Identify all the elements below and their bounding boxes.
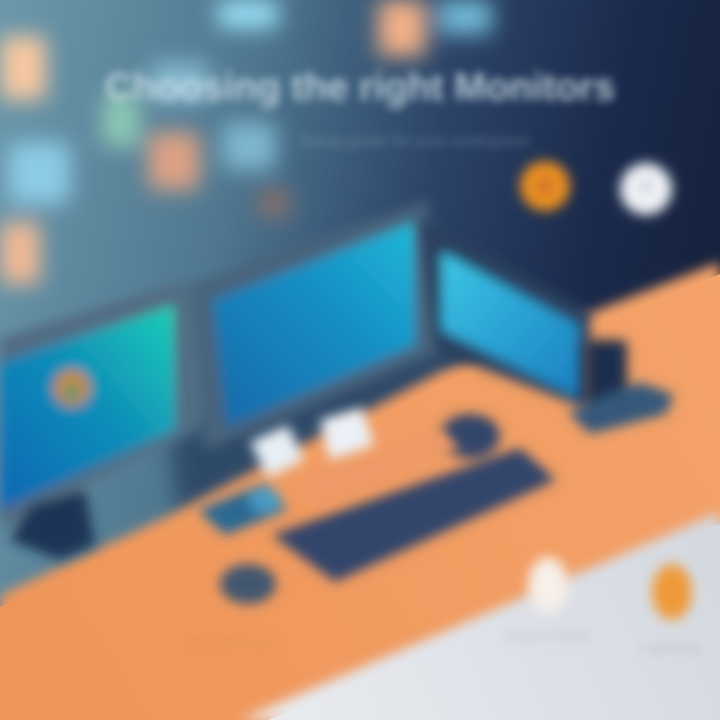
icon: white item on floor: [528, 557, 568, 613]
icon: colourful logo: [54, 370, 90, 406]
monitor: left: [0, 280, 198, 560]
floating app tiles: [0, 0, 492, 284]
monitor stand: [10, 490, 95, 560]
icon: orange item on floor: [652, 564, 692, 620]
monitor: centre: [190, 200, 445, 450]
icon: orange badge: [520, 161, 570, 211]
subtitle: Setup guide for your workspace: [300, 133, 530, 150]
wall shadow under monitors: [170, 340, 470, 520]
title: Choosing the right Monitors: [105, 66, 615, 109]
caption: desk: Peripherals: [190, 635, 275, 652]
white cards: [250, 408, 374, 478]
desk tray: [295, 428, 460, 508]
mouse: [220, 564, 276, 604]
caption: floor left: Ergonomics: [505, 627, 590, 643]
floor: [240, 512, 720, 720]
desk: [0, 262, 720, 720]
caption: floor right: Lighting: [640, 639, 700, 655]
small device: [198, 483, 287, 535]
icon: white badge: [620, 163, 672, 215]
monitor: right: [420, 215, 590, 410]
monitor stand: right: [568, 340, 674, 434]
keyboard: [272, 414, 556, 582]
